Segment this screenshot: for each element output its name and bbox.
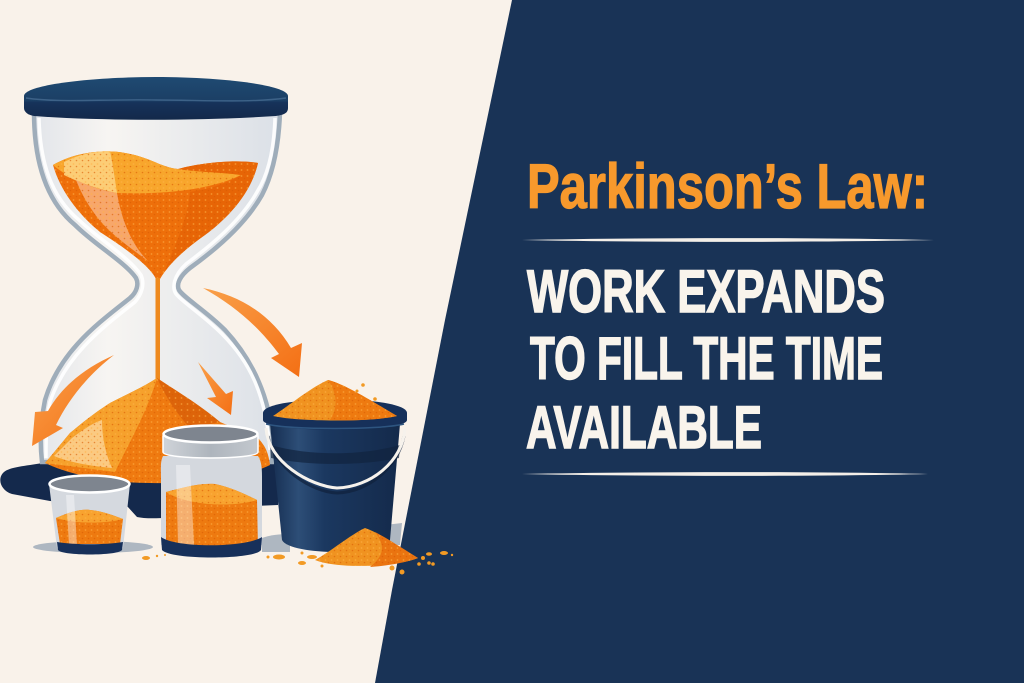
small glass with sand: [49, 476, 130, 554]
shadows on ground: [33, 523, 402, 553]
divider: top: [522, 238, 934, 242]
heading: work expands to fill the time available: WORK EXPANDS: [527, 258, 885, 325]
spilled sand pile: [142, 383, 453, 574]
glass jar with sand: [161, 426, 262, 558]
arrow: middle: [198, 362, 233, 415]
arrow: right curved: [203, 288, 302, 377]
falling sand stream: [156, 278, 160, 380]
hourglass top cap: [24, 77, 288, 120]
divider: bottom: [522, 472, 928, 476]
sand in bucket: [273, 380, 397, 420]
hourglass glass: [34, 112, 280, 462]
bucket with sand: [263, 380, 407, 552]
upper sand: [53, 151, 258, 279]
hourglass base: [0, 463, 280, 518]
heading: work expands to fill the time available: AVAILABLE: [526, 394, 762, 461]
lower sand pile: [45, 378, 270, 483]
heading: work expands to fill the time available: [526, 258, 885, 461]
bucket handle: [266, 428, 405, 493]
panel: navy slanted title panel: [375, 0, 1024, 683]
arrow: left curved: [32, 355, 114, 446]
